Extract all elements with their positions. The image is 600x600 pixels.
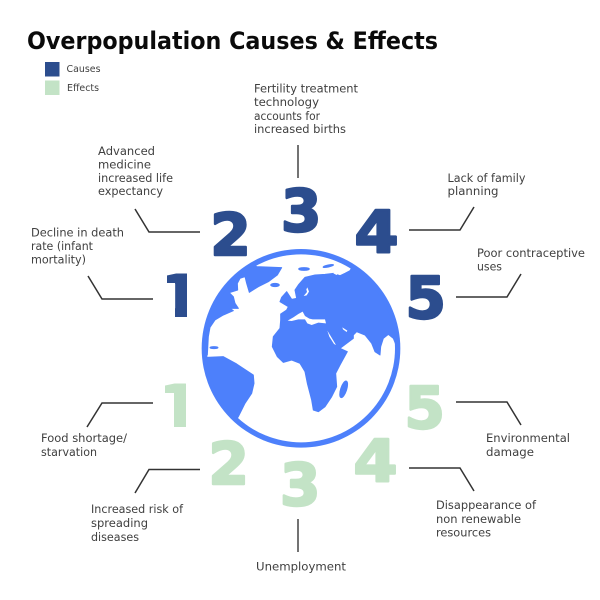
- cause 4: Lack of family: [448, 171, 526, 185]
- cause 1: mortality): [31, 252, 86, 266]
- cause 2: medicine: [98, 158, 151, 172]
- cause 2: increased life: [98, 171, 173, 185]
- effect 2: diseases: [91, 530, 139, 544]
- legend: [45, 62, 100, 95]
- effect 4: non renewable: [436, 512, 521, 526]
- cause 1: Decline in death: [31, 226, 124, 240]
- effect 2: Increased risk of: [91, 502, 184, 516]
- effect 3: 3: [280, 451, 320, 519]
- effect 3: Unemployment: [256, 560, 346, 574]
- cause 5: 5: [406, 264, 446, 332]
- effect 2: 2: [208, 430, 249, 498]
- cause 3: Fertility treatment: [254, 82, 358, 96]
- legend: Effects: [67, 83, 99, 94]
- cause 5: uses: [477, 260, 502, 274]
- effect 2: [91, 430, 249, 544]
- cause 4: [354, 171, 526, 266]
- effect 1: starvation: [41, 445, 97, 459]
- cause 3: 3: [281, 177, 321, 245]
- effect 5: damage: [486, 445, 534, 459]
- effect 3: [256, 451, 346, 574]
- cause 1: 1: [160, 263, 200, 331]
- effect 5: 5: [404, 374, 445, 442]
- cause 1: rate (infant: [31, 239, 93, 253]
- cause 5: [406, 246, 585, 332]
- effect 5: [404, 374, 570, 459]
- cause 3: increased births: [254, 122, 346, 136]
- effect 4: [354, 427, 537, 540]
- cause 2: expectancy: [98, 184, 163, 198]
- cause 2: Advanced: [98, 144, 155, 158]
- effect 1: 1: [158, 373, 199, 441]
- effect 4: Disappearance of: [436, 498, 537, 512]
- effect 1: Food shortage/: [41, 431, 127, 445]
- effect 5: Environmental: [486, 431, 570, 445]
- effect 4: 4: [354, 427, 398, 495]
- cause 1: [32, 228, 187, 317]
- title: Overpopulation Causes & Effects: [27, 27, 438, 55]
- effect 2: spreading: [91, 516, 148, 530]
- cause 4: planning: [448, 184, 498, 198]
- effect 4: resources: [436, 526, 491, 540]
- cause 3: accounts for: [254, 109, 320, 123]
- cause 5: Poor contraceptive: [477, 246, 585, 260]
- cause 2: 2: [210, 201, 251, 269]
- cause 3: technology: [254, 95, 319, 109]
- legend: Causes: [66, 64, 100, 75]
- cause 2: [98, 144, 251, 269]
- icon: globe: [202, 249, 400, 448]
- cause 4: 4: [354, 198, 398, 266]
- cause 3: [254, 82, 358, 245]
- effect 1: [42, 384, 186, 456]
